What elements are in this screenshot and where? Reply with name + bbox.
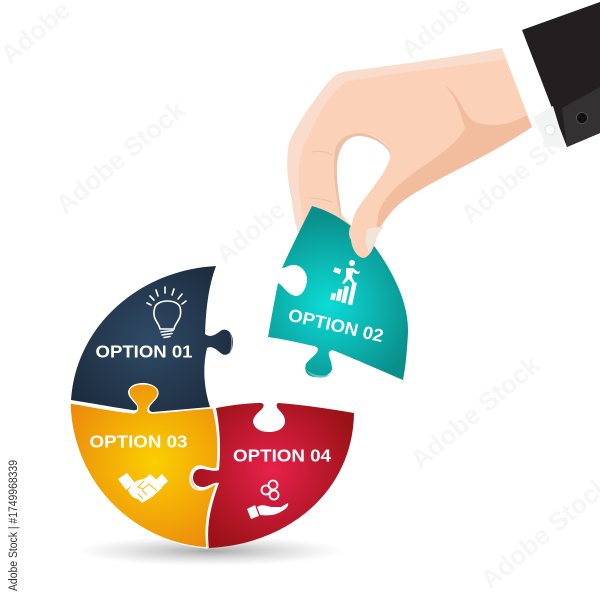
icon: handshake [118, 473, 168, 503]
stock id text: Adobe Stock | #1749968339 [8, 460, 20, 591]
watermark text: Adobe Stock [455, 104, 596, 230]
finger creases [310, 151, 332, 202]
option 01 tab highlight [229, 331, 232, 354]
thumb nail [366, 227, 384, 252]
panel: option 02 teal puzzle piece [268, 206, 408, 380]
panel: option 01 navy puzzle piece [71, 266, 233, 412]
thumb over piece [349, 225, 378, 258]
watermark text: Adobe Stock [405, 349, 546, 475]
palm shadow [375, 85, 532, 236]
icon: light bulb [147, 287, 186, 338]
label: option 04: OPTION 04 [233, 446, 331, 466]
sleeve button [576, 112, 588, 124]
sleeve cuff shade [562, 87, 600, 147]
shirt cuff [533, 106, 565, 147]
icon: hand with gears [247, 480, 288, 519]
watermark text: Adobe Stock [50, 94, 191, 220]
panel: hand holding piece [287, 2, 600, 258]
shirt button [545, 125, 555, 135]
index finger shade [334, 133, 391, 218]
ground shadow [75, 536, 345, 566]
panel: option 03 yellow puzzle piece [70, 384, 218, 548]
icon: running businessman and bars [330, 260, 360, 305]
label: option 01: OPTION 01 [96, 342, 193, 362]
label: option 02: OPTION 02 [286, 305, 385, 346]
panel: option 04 red puzzle piece [190, 403, 354, 548]
option 04 socket rim [190, 473, 200, 491]
watermark text: Adobe [210, 195, 291, 270]
hand top highlight [287, 48, 506, 232]
option 02 tab highlight [306, 368, 330, 378]
sleeve [522, 2, 600, 147]
hand shape [287, 48, 532, 258]
label: option 03: OPTION 03 [90, 432, 188, 452]
